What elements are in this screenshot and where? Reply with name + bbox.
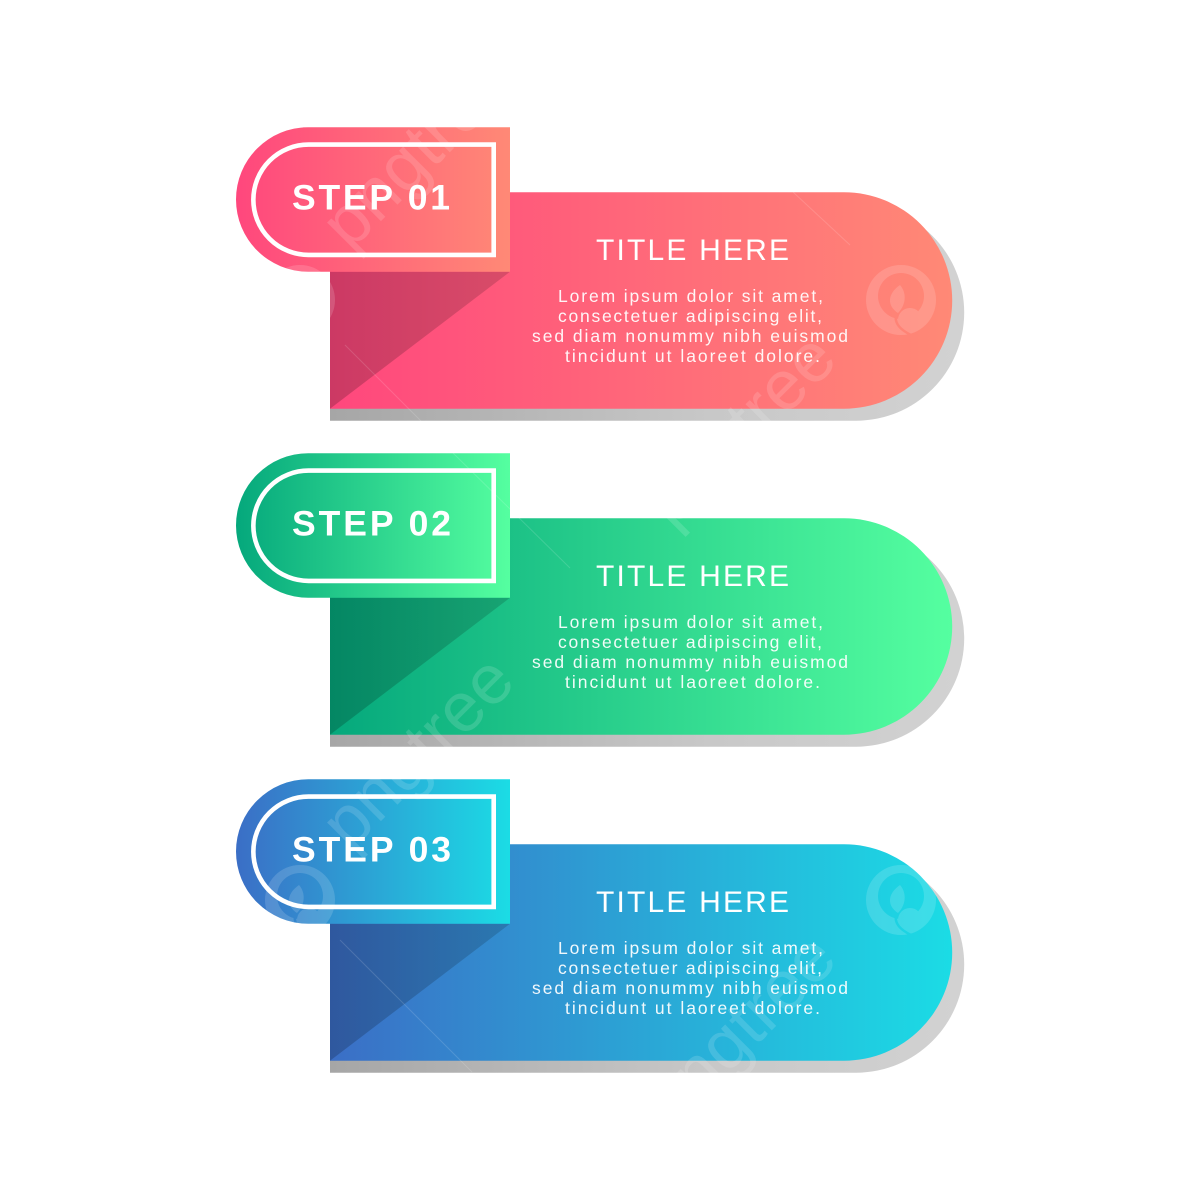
body text [532, 938, 848, 1018]
panel: step 03 [236, 779, 964, 1073]
body text: consectetuer adipiscing elit, [558, 306, 822, 326]
tab outline [253, 145, 494, 255]
body text: sed diam nonummy nibh euismod [532, 978, 848, 998]
content panel [330, 518, 952, 735]
body text [532, 612, 848, 692]
folded shade [330, 272, 510, 409]
panel: step 02 [236, 453, 964, 747]
step label: STEP 03 [292, 830, 451, 870]
body text: sed diam nonummy nibh euismod [532, 326, 848, 346]
step tab [236, 779, 510, 924]
panel shadow [330, 530, 964, 747]
title: TITLE HERE [596, 560, 789, 593]
body text: tincidunt ut laoreet dolore. [565, 346, 820, 366]
body text: Lorem ipsum dolor sit amet, [558, 612, 823, 632]
step tab [236, 127, 510, 272]
panel shadow [330, 204, 964, 421]
title: TITLE HERE [596, 886, 789, 919]
watermark text: pngtree [627, 318, 850, 541]
panel shadow [330, 856, 964, 1073]
title: TITLE HERE [596, 234, 789, 267]
body text: Lorem ipsum dolor sit amet, [558, 938, 823, 958]
tab outline [253, 797, 494, 907]
body text: consectetuer adipiscing elit, [558, 632, 822, 652]
step label: STEP 02 [292, 504, 451, 544]
watermark text [305, 40, 850, 1141]
watermark text: pngtree [627, 918, 850, 1141]
watermark text: pngtree [305, 40, 528, 263]
body text: tincidunt ut laoreet dolore. [565, 998, 820, 1018]
folded shade [330, 598, 510, 735]
step label: STEP 01 [292, 178, 450, 218]
content panel [330, 192, 952, 409]
body text: Lorem ipsum dolor sit amet, [558, 286, 823, 306]
body text: tincidunt ut laoreet dolore. [565, 672, 820, 692]
body text [532, 286, 848, 366]
step tab [236, 453, 510, 598]
panel: step 01 [236, 127, 964, 421]
body text: consectetuer adipiscing elit, [558, 958, 822, 978]
infographic [236, 127, 964, 1073]
watermark lines [340, 192, 850, 1072]
content panel [330, 844, 952, 1061]
folded shade [330, 924, 510, 1061]
watermark text: pngtree [305, 640, 528, 863]
watermark overlay [265, 127, 936, 1072]
body text: sed diam nonummy nibh euismod [532, 652, 848, 672]
tab outline [253, 471, 494, 581]
watermark circles [264, 264, 937, 936]
